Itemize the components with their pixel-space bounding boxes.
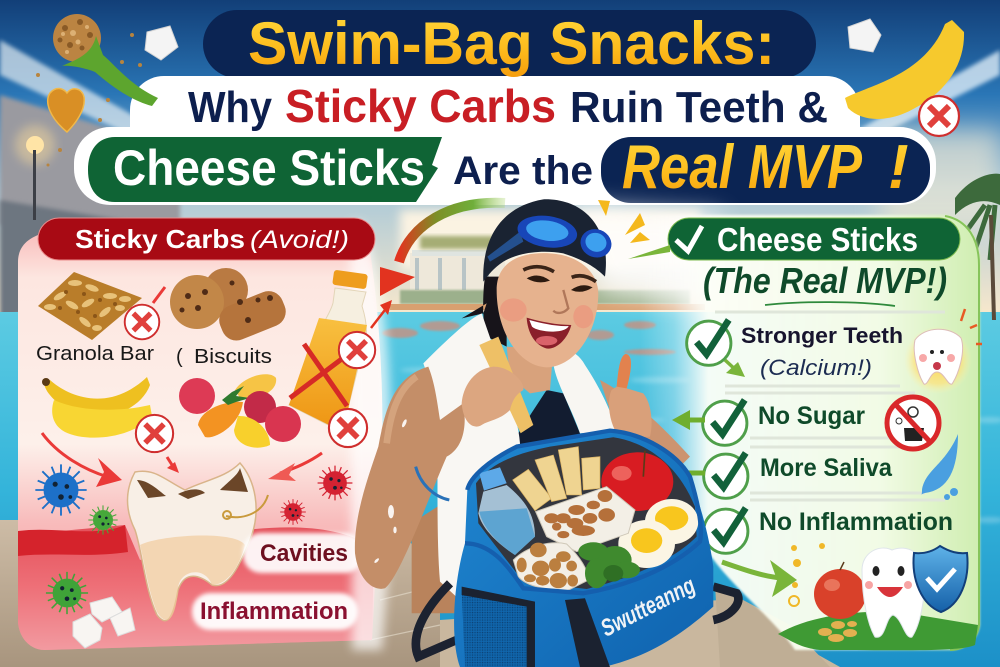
- icon: nuts: [818, 621, 857, 642]
- water droplets: [374, 419, 408, 564]
- sparkles near goggles: [598, 200, 670, 259]
- x badge: banana: [136, 415, 173, 452]
- lower nut container: [513, 543, 589, 591]
- benefit: more saliva: [686, 453, 893, 498]
- snack bag: [416, 431, 738, 667]
- decayed tooth: [128, 463, 268, 621]
- label: inflammation: [192, 593, 358, 630]
- mesh pocket: [462, 590, 535, 667]
- right arm: [600, 380, 690, 477]
- goggles: [487, 212, 615, 262]
- title line 1 text: Swim-Bag Snacks:: [248, 10, 775, 77]
- icon: shield: [914, 546, 968, 612]
- granola bar: [38, 272, 142, 340]
- sugar cubes: [73, 597, 135, 648]
- sugar cube: [145, 26, 178, 60]
- benefit: no inflammation: [704, 508, 953, 553]
- cheese sticks in bag: [513, 447, 600, 511]
- header text: Cheese Sticks: [717, 221, 918, 258]
- swim cap: [483, 199, 606, 282]
- icon: saliva drop: [922, 434, 958, 500]
- x badge: bottle bottom: [329, 409, 367, 447]
- arrow: red-green curved arrow: [371, 203, 505, 328]
- decorative flying snacks: top right: [845, 19, 964, 136]
- icon: apple: [814, 562, 866, 619]
- panel header: [38, 218, 375, 260]
- panel header: [668, 218, 960, 260]
- swimmer girl: [355, 199, 690, 613]
- green stick: [62, 36, 158, 106]
- header avoid text: (Avoid!): [250, 226, 349, 254]
- x badge: [919, 96, 959, 136]
- title line 3 backing: [74, 127, 936, 205]
- granola ball: [53, 14, 101, 62]
- viruses: [35, 464, 352, 614]
- sugar cube: [848, 19, 881, 52]
- real mvp text: Real MVP: [622, 133, 863, 202]
- left arm: [355, 367, 465, 589]
- benefit: stronger teeth: Stronger Teeth: [741, 323, 903, 348]
- biscuits: [170, 268, 290, 345]
- title line 2 backing: [130, 76, 860, 166]
- gum area: [18, 525, 374, 650]
- hair behind: [462, 277, 507, 347]
- granola bar label: Granola Bar: [36, 343, 154, 365]
- pointer to header: [628, 245, 670, 259]
- x badge: granola: [125, 305, 159, 339]
- white haze behind top: [570, 205, 730, 310]
- label: inflammation: Inflammation: [200, 598, 348, 625]
- panel background: [640, 215, 980, 650]
- benefit: stronger teeth: [687, 320, 903, 380]
- panel: cheese sticks: [570, 205, 982, 650]
- bag body: [454, 431, 713, 667]
- mouth: [527, 318, 571, 349]
- panel: sticky carbs: [18, 218, 392, 650]
- biscuits label: Biscuits: [194, 346, 272, 368]
- towel: [423, 313, 520, 603]
- bracelet: [416, 467, 449, 500]
- badge: real mvp: [601, 137, 930, 203]
- eyes and brows: [523, 267, 596, 292]
- x badge: bottle top: [339, 332, 375, 368]
- face: [497, 253, 598, 367]
- benefit: stronger teeth: (Calcium!): [760, 355, 872, 380]
- torso skin: [412, 490, 463, 613]
- neck: [507, 347, 553, 393]
- gummy candies: [179, 374, 301, 448]
- benefit: no inflammation: No Inflammation: [759, 508, 953, 536]
- bag interior: [476, 437, 697, 589]
- panel background: [18, 222, 382, 650]
- bag rim: [465, 431, 701, 593]
- icon: no sugar sign: [887, 397, 939, 449]
- benefit: no sugar: [672, 400, 865, 445]
- icon: smiling tooth: [862, 548, 925, 637]
- title line 2 why: Why: [188, 83, 272, 132]
- hand with stick: [462, 367, 523, 427]
- eggs: [618, 499, 698, 568]
- black band: [565, 598, 610, 667]
- cheese stick: [479, 337, 533, 433]
- banana: [42, 377, 152, 438]
- crumbs: [36, 33, 142, 166]
- leaf: [778, 612, 978, 650]
- decorative flying snacks: top left: [36, 14, 178, 166]
- exclamation mark: !: [888, 133, 909, 202]
- heart cookie: [48, 88, 84, 132]
- banana: [845, 20, 964, 119]
- title line 2 ruin teeth: Ruin Teeth &: [570, 83, 828, 132]
- title heading: [74, 10, 936, 205]
- header text: Sticky Carbs: [75, 224, 245, 254]
- badge: cheese sticks: [88, 137, 442, 202]
- benefit: no sugar: No Sugar: [758, 402, 865, 430]
- subheading: (The Real MVP!): [703, 260, 947, 301]
- benefit: more saliva: More Saliva: [760, 454, 893, 482]
- title line 1 pill: [203, 10, 816, 78]
- cheese sticks text: Cheese Sticks: [113, 140, 425, 196]
- nose: [553, 290, 568, 313]
- bag straps: [416, 583, 738, 657]
- icon: happy tooth glow: [904, 309, 982, 394]
- water bottle: [478, 467, 535, 555]
- nut container: [536, 487, 635, 552]
- arrow to healthy result: [722, 543, 825, 606]
- juice bottle: [289, 270, 368, 432]
- red arrows to tooth: [42, 287, 322, 487]
- apple: [601, 452, 673, 511]
- header check: [676, 226, 702, 251]
- thumbs up: [609, 354, 652, 438]
- spinach: [578, 542, 640, 588]
- label: cavities: [243, 533, 363, 573]
- biscuits paren label: (: [176, 346, 183, 368]
- bag brand text: Swutteanng: [596, 572, 700, 642]
- are the text: Are the: [453, 149, 593, 193]
- swimsuit: [518, 390, 580, 473]
- title line 2 sticky carbs: Sticky Carbs: [285, 80, 556, 132]
- label: cavities: Cavities: [260, 540, 348, 567]
